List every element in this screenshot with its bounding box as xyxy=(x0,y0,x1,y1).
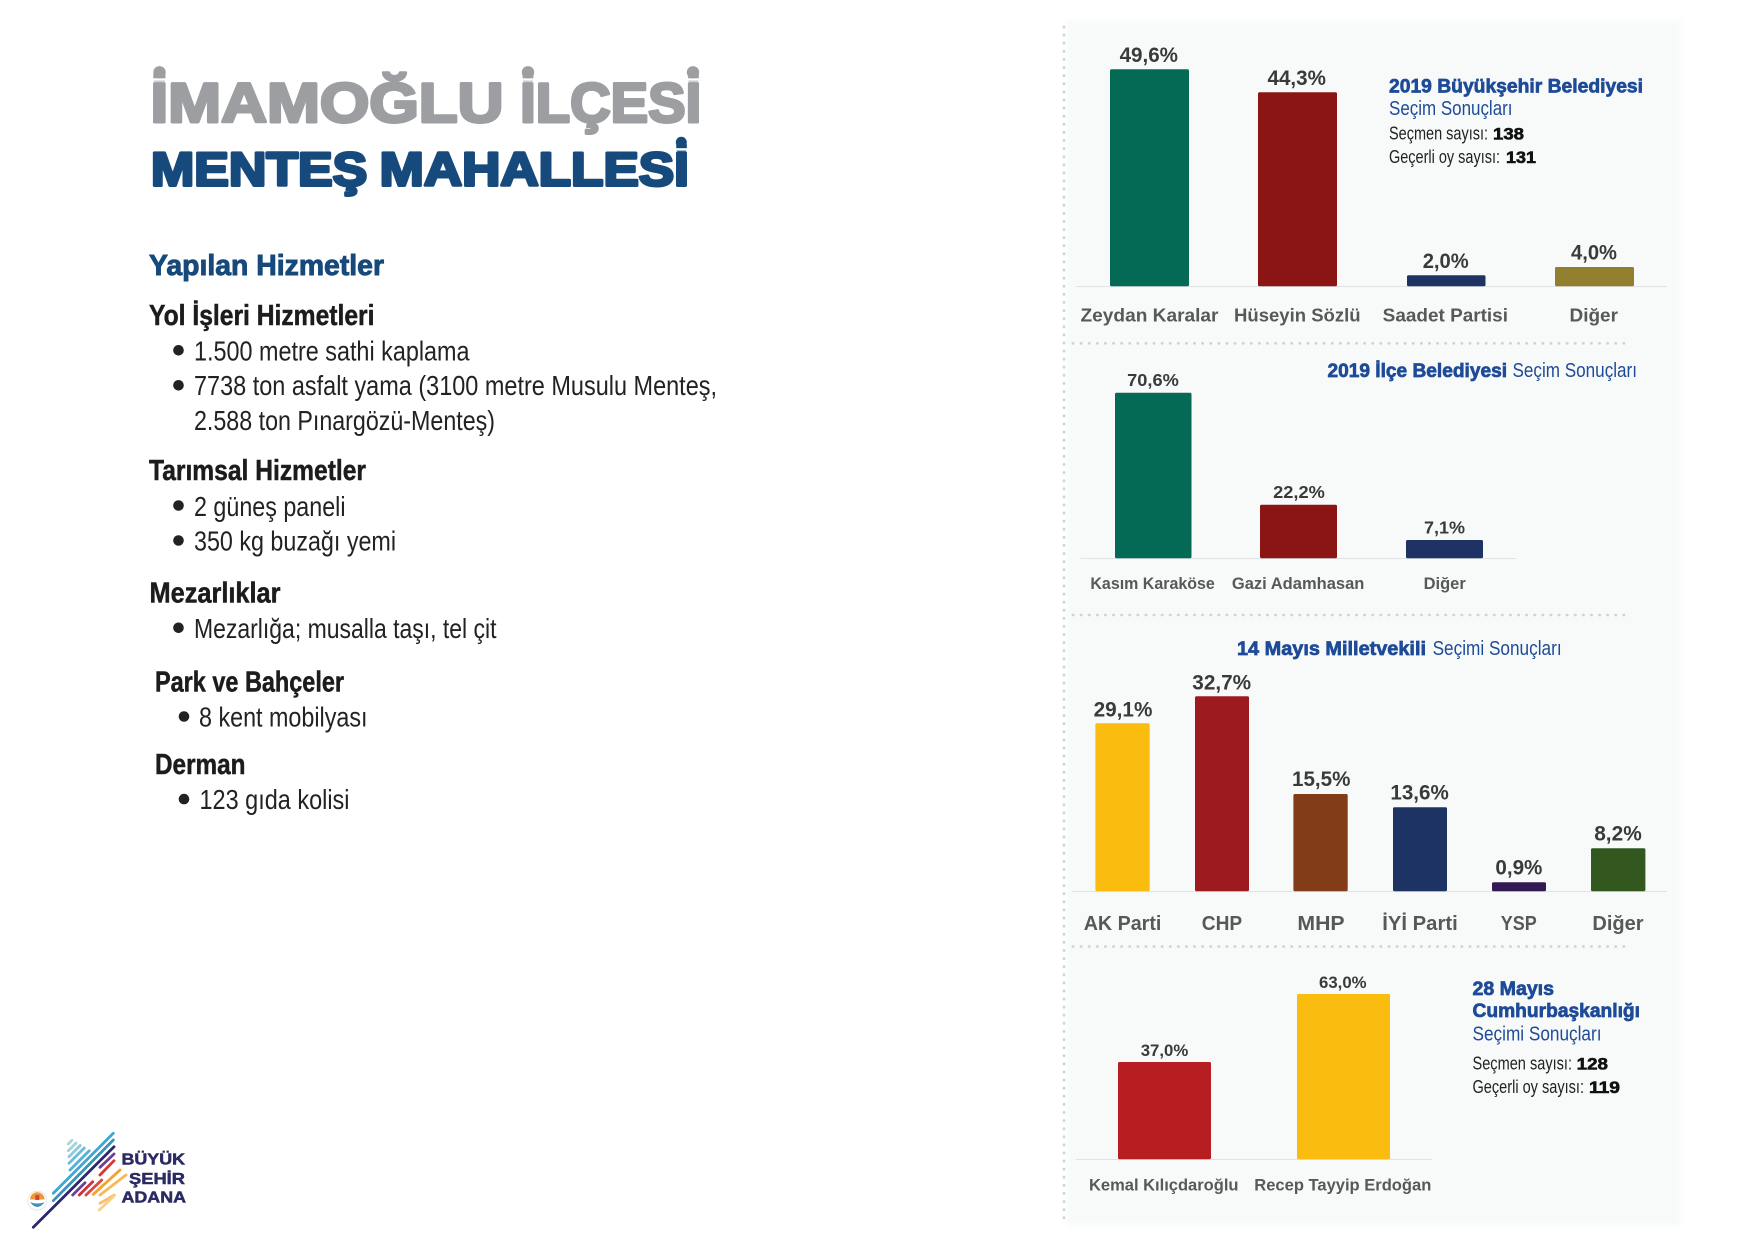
section heading: Yapılan Hizmetler: Yapılan Hizmetler xyxy=(149,250,384,282)
callout: 2019 metropolitan info: Seçmen sayısı: xyxy=(1389,123,1488,143)
bar: Diğer: 4,0% xyxy=(1571,241,1617,264)
callout: 28 Mayıs info: Geçerli oy sayısı: xyxy=(1472,1077,1584,1097)
bar: Recep Tayyip Erdoğan xyxy=(1254,973,1431,1195)
bar: MHP: MHP xyxy=(1297,912,1345,935)
heading: 2019 district results: Seçim Sonuçları xyxy=(1512,360,1637,382)
bar: Saadet Partisi: 2,0% xyxy=(1423,250,1469,273)
bar: Kemal Kılıçdaroğlu: 37,0% xyxy=(1141,1041,1188,1060)
bar: İYİ Parti xyxy=(1382,782,1458,935)
bar: Diğer xyxy=(1555,241,1634,326)
chart: 28 Mayıs presidential results xyxy=(1076,973,1432,1195)
callout: 2019 metropolitan info: 131 xyxy=(1506,148,1536,167)
subheading: Tarımsal: Tarımsal Hizmetler xyxy=(149,455,366,487)
bar: İYİ Parti: İYİ Parti xyxy=(1382,912,1458,935)
bar: İYİ Parti: 13,6% xyxy=(1390,782,1449,804)
chart: 14 Mayıs parliamentary results xyxy=(1072,672,1667,935)
callout: 2019 metropolitan info: 2019 Büyükşehir Belediyesi xyxy=(1389,76,1643,98)
bar: Saadet Partisi xyxy=(1383,250,1508,326)
logo wordmark: ŞEHİR xyxy=(129,1170,186,1188)
bar: CHP: CHP xyxy=(1202,912,1242,935)
list: agriculture items: 350 kg buzağı yemi xyxy=(194,526,396,557)
list: cemetery items: Mezarlığa; musalla taşı, tel çit xyxy=(194,613,497,644)
list: road items: 2.588 ton Pınargözü-Menteş) xyxy=(194,405,495,436)
bar: Diğer: Diğer xyxy=(1424,574,1466,593)
bar: YSP: 0,9% xyxy=(1495,856,1543,880)
bar: MHP xyxy=(1292,768,1351,935)
subheading: Mezarlıklar: Mezarlıklar xyxy=(150,578,280,610)
bar: AK Parti: 29,1% xyxy=(1094,698,1153,722)
bar: Diğer: Diğer xyxy=(1570,305,1618,326)
callout: 28 Mayıs info: 128 xyxy=(1577,1054,1608,1074)
title: MENTEŞ xyxy=(151,144,367,196)
list: park items: 8 kent mobilyası xyxy=(199,702,368,733)
logo: Büyükşehir Adana xyxy=(28,1133,186,1227)
heading: 2019 district results xyxy=(1328,360,1637,382)
list: road items: 7738 ton asfalt yama (3100 metre Musulu Menteş, xyxy=(194,370,717,401)
list: agriculture items xyxy=(173,491,396,556)
logo wordmark: ADANA xyxy=(122,1189,186,1206)
bar: MHP: 15,5% xyxy=(1292,768,1351,791)
chart: 2019 metropolitan results xyxy=(1076,44,1667,326)
callout: 28 Mayıs info xyxy=(1472,979,1640,1097)
bar: Zeydan Karalar: Zeydan Karalar xyxy=(1080,305,1218,326)
title: İMAMOĞLU xyxy=(150,72,504,134)
bar: YSP xyxy=(1492,856,1546,935)
bar: CHP: 32,7% xyxy=(1192,672,1251,694)
callout: 2019 metropolitan info xyxy=(1389,76,1643,167)
bar: Hüseyin Sözlü xyxy=(1234,67,1361,326)
bar: Kasım Karaköse: 70,6% xyxy=(1127,370,1179,390)
bar: Diğer: 7,1% xyxy=(1424,518,1465,538)
bar: AK Parti: AK Parti xyxy=(1084,912,1161,935)
heading: 2019 district results: 2019 İlçe Belediyesi xyxy=(1328,361,1507,382)
bar: Gazi Adamhasan: 22,2% xyxy=(1273,482,1325,502)
bar: Recep Tayyip Erdoğan: Recep Tayyip Erdoğan xyxy=(1254,1176,1431,1195)
callout: 28 Mayıs info: Cumhurbaşkanlığı xyxy=(1472,1001,1640,1022)
heading: 14 Mayıs results: Seçimi Sonuçları xyxy=(1433,638,1562,660)
bar: Hüseyin Sözlü: 44,3% xyxy=(1268,67,1326,90)
callout: 28 Mayıs info: 28 Mayıs xyxy=(1472,979,1554,1000)
list: aid items: 123 gıda kolisi xyxy=(200,784,350,815)
title xyxy=(150,66,703,196)
icon: striped star xyxy=(33,1133,126,1227)
callout: 2019 metropolitan info: 138 xyxy=(1493,124,1524,143)
bar: Diğer: 8,2% xyxy=(1594,822,1642,846)
bar: Kemal Kılıçdaroğlu: Kemal Kılıçdaroğlu xyxy=(1089,1176,1238,1195)
title: İLÇESİ xyxy=(520,72,701,134)
list: road items xyxy=(173,336,717,436)
bar: Hüseyin Sözlü: Hüseyin Sözlü xyxy=(1234,305,1361,326)
callout: 28 Mayıs info: 119 xyxy=(1589,1078,1620,1097)
panel: election results xyxy=(1064,20,1681,1226)
heading: 14 Mayıs results: 14 Mayıs Milletvekili xyxy=(1237,639,1426,660)
logo wordmark xyxy=(122,1149,186,1206)
callout: 2019 metropolitan info: Geçerli oy sayısı: xyxy=(1389,147,1500,167)
bar: Recep Tayyip Erdoğan: 63,0% xyxy=(1319,973,1367,992)
list: agriculture items: 2 güneş paneli xyxy=(194,491,346,522)
bar: Kasım Karaköse xyxy=(1090,370,1215,593)
bar: Kemal Kılıçdaroğlu xyxy=(1089,1041,1238,1195)
chart: 2019 district results xyxy=(1080,370,1516,593)
bar: Zeydan Karalar xyxy=(1080,44,1218,326)
callout: 28 Mayıs info: Seçmen sayısı: xyxy=(1472,1054,1572,1074)
logo wordmark: BÜYÜK xyxy=(122,1149,185,1168)
bar: Kasım Karaköse: Kasım Karaköse xyxy=(1090,574,1215,593)
icon: municipal crest xyxy=(28,1191,47,1210)
callout: 2019 metropolitan info: Seçim Sonuçları xyxy=(1389,98,1512,120)
bar: AK Parti xyxy=(1084,698,1161,935)
list: road items: 1.500 metre sathi kaplama xyxy=(194,336,470,367)
bar: YSP: YSP xyxy=(1501,912,1537,935)
subheading: Park ve Bahçeler: Park ve Bahçeler xyxy=(155,667,344,699)
bar: Zeydan Karalar: 49,6% xyxy=(1120,44,1178,67)
subheading: Derman: Derman xyxy=(155,749,246,781)
title: MAHALLESİ xyxy=(380,144,689,196)
bar: Diğer: Diğer xyxy=(1592,912,1644,935)
heading: 14 Mayıs results xyxy=(1237,638,1562,660)
text block: services list xyxy=(149,300,717,815)
bar: Gazi Adamhasan xyxy=(1232,482,1364,593)
bar: Diğer xyxy=(1406,518,1483,593)
bar: Diğer xyxy=(1591,822,1645,935)
bar: CHP xyxy=(1192,672,1251,935)
bar: Gazi Adamhasan: Gazi Adamhasan xyxy=(1232,574,1364,593)
bar: Saadet Partisi: Saadet Partisi xyxy=(1383,305,1508,326)
subheading: Yol İşleri: Yol İşleri Hizmetleri xyxy=(149,300,374,332)
callout: 28 Mayıs info: Seçimi Sonuçları xyxy=(1472,1024,1602,1046)
